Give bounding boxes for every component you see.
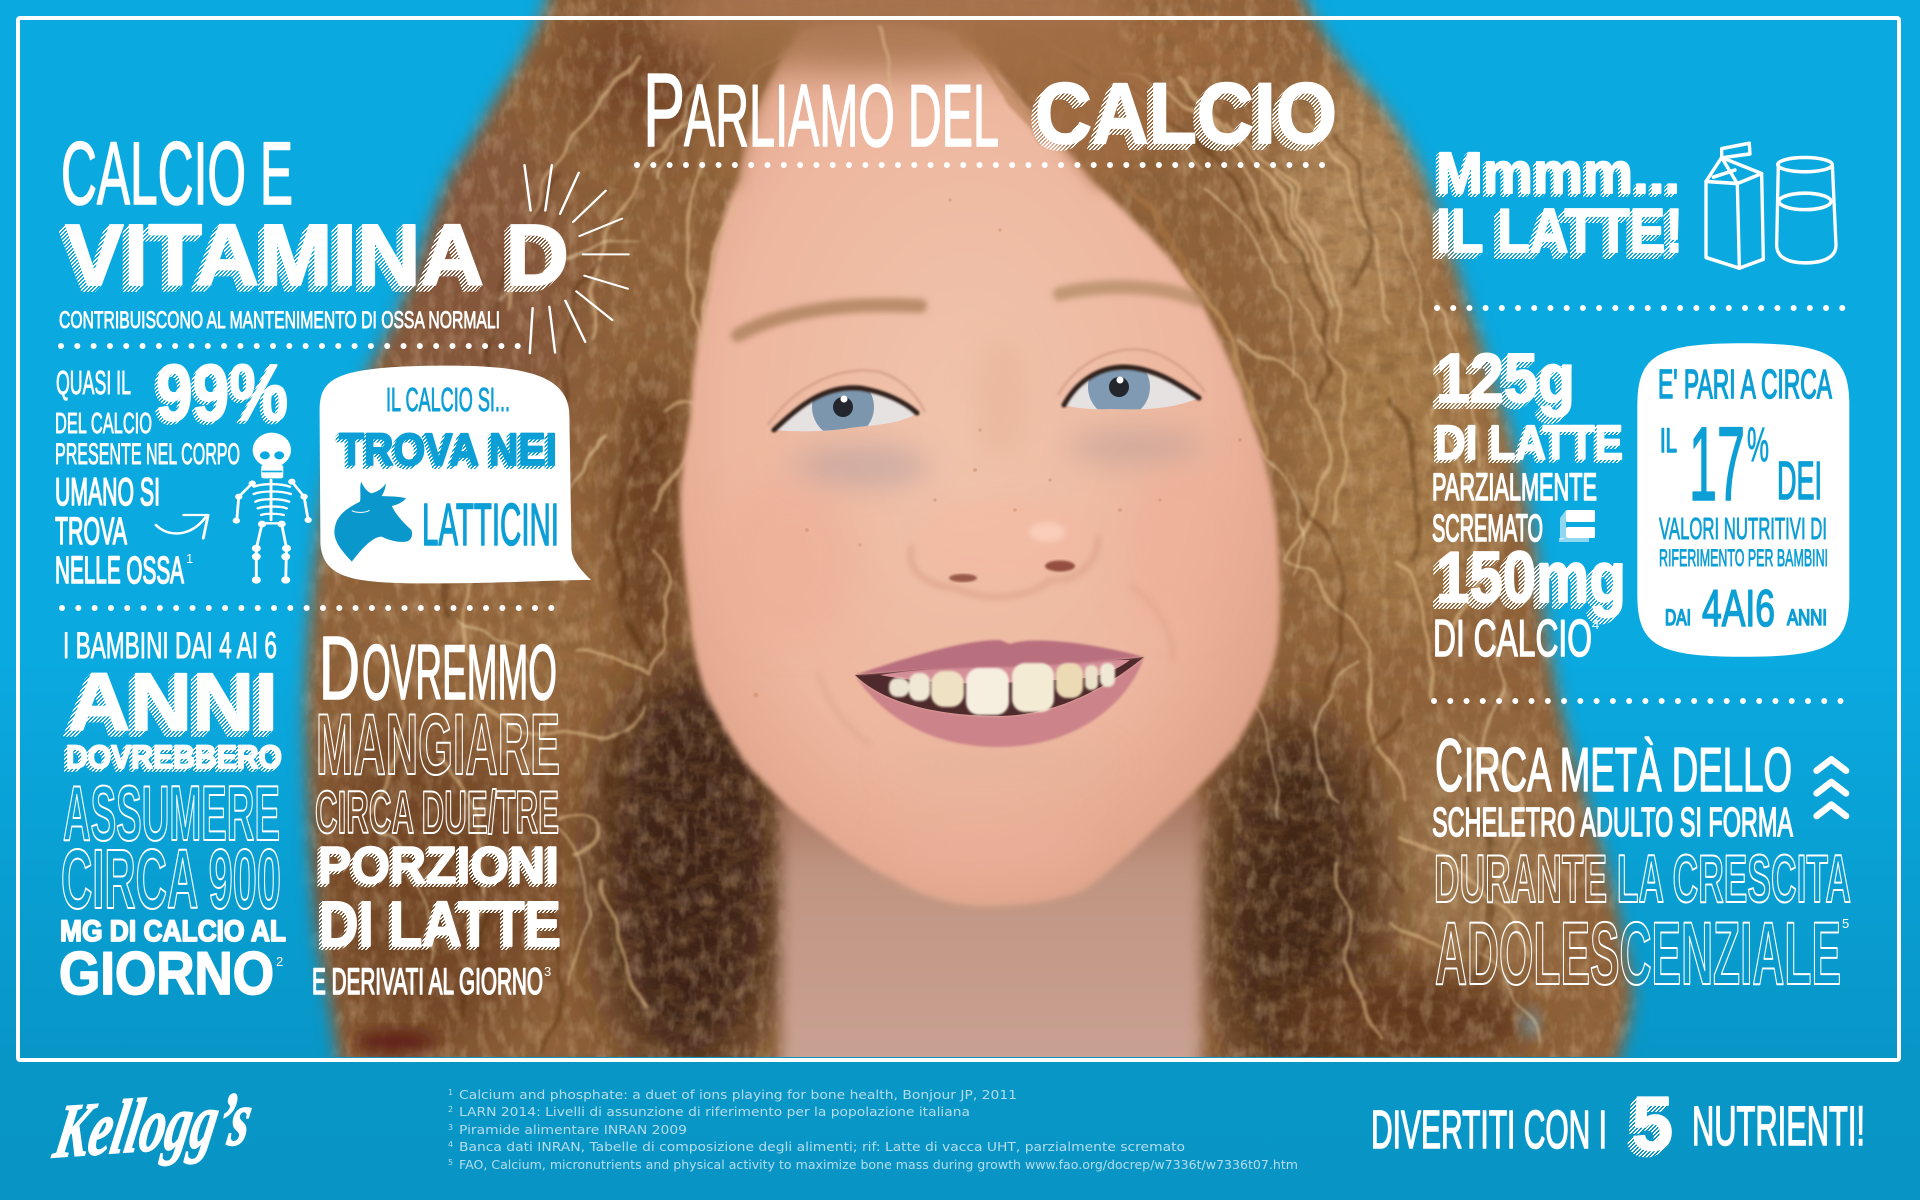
text: del calcio: DEL CALCIO xyxy=(55,408,152,440)
stat: 99%: 99% xyxy=(156,348,288,437)
icon: milk carton xyxy=(1706,143,1763,268)
text: trova: TROVA xyxy=(55,511,127,553)
callout: speech bubble xyxy=(320,366,591,583)
text: circa due/tre: CIRCA DUE/TRE xyxy=(315,779,559,846)
text: dovrebbero: DOVREBBERO xyxy=(66,739,282,775)
box text: anni: ANNI xyxy=(1787,605,1827,630)
text: mg di calcio al: MG DI CALCIO AL xyxy=(60,915,286,948)
rosy cheeks and chin xyxy=(720,465,1250,871)
icon: equals sign xyxy=(1559,510,1595,542)
text: nelle ossa: NELLE OSSA xyxy=(55,550,184,592)
box text: il: IL xyxy=(1660,422,1677,460)
panel: 17 percent white box xyxy=(1637,343,1849,657)
eyebrows xyxy=(738,287,1198,335)
text: e derivati al giorno: E DERIVATI AL GIORNO xyxy=(312,961,543,1002)
footnote mark 4: 4 xyxy=(1592,617,1599,632)
divider xyxy=(62,605,553,611)
panel: adolescent growth xyxy=(1432,724,1851,1003)
neck xyxy=(780,790,1202,1075)
stat: 125g: 125g xyxy=(1436,339,1575,417)
heading: mmmm: Mmmm... xyxy=(1436,141,1680,206)
box text: dai: DAI xyxy=(1665,605,1691,630)
footnotes: 1 xyxy=(448,1088,453,1097)
title: parliamo del: P xyxy=(643,53,685,169)
text: parzialmente: PARZIALMENTE xyxy=(1432,467,1597,509)
footnotes: 3 xyxy=(448,1123,453,1132)
panel: 17 percent white box: 17 xyxy=(1689,406,1745,523)
divider xyxy=(1434,698,1848,704)
text: scremato: SCREMATO xyxy=(1432,508,1543,550)
icon: upward chevrons xyxy=(1817,759,1846,816)
right eye xyxy=(1058,349,1205,418)
face xyxy=(680,23,1280,906)
bubble shape xyxy=(320,366,591,583)
box shape xyxy=(1637,343,1849,657)
footnotes: Calcium and phosphate: a duet of ions playing for bone health, Bonjour JP, 2011 xyxy=(459,1087,1017,1102)
title divider xyxy=(637,162,1338,168)
nose xyxy=(911,500,1098,597)
panel: mmmm il latte xyxy=(1436,141,1836,268)
icon: cow xyxy=(334,482,412,562)
text: di latte: DI LATTE xyxy=(1435,417,1623,470)
slogan: divertiti con i: DIVERTITI CON I xyxy=(1371,1100,1607,1160)
text: presente nel corpo: PRESENTE NEL CORPO xyxy=(55,438,240,471)
footnotes: Banca dati INRAN, Tabelle di composizione degli alimenti; rif: Latte di vacca UHT, parzialmente scremato xyxy=(459,1139,1185,1154)
under-eye shading xyxy=(794,340,1204,486)
panel: 99 percent in bones xyxy=(55,348,312,592)
text: quasi il: QUASI IL xyxy=(56,364,131,401)
text: di latte: DI LATTE xyxy=(319,888,561,960)
heading: vitamina D: VITAMINA D xyxy=(65,207,569,304)
icon: skeleton xyxy=(233,433,312,584)
footnote mark 5: 5 xyxy=(1842,916,1849,931)
footnotes: Piramide alimentare INRAN 2009 xyxy=(459,1122,687,1137)
teeth xyxy=(889,663,1115,715)
text: i bambini dai 4 ai 6: I BAMBINI DAI 4 AI 6 xyxy=(63,625,277,666)
text: umano si: UMANO SI xyxy=(55,471,160,514)
text: di calcio: DI CALCIO xyxy=(1433,610,1592,668)
box stat: percent sign: % xyxy=(1747,419,1769,472)
heading: calcio e: CALCIO E xyxy=(61,123,293,223)
smile xyxy=(818,585,1173,747)
text: circa 900: CIRCA 900 xyxy=(61,832,281,926)
icon: sun rays xyxy=(524,165,629,353)
footnotes: FAO, Calcium, micronutrients and physical activity to maximize bone mass during growth www.fao.org/docrep/w7336t/w7336t07.htm xyxy=(459,1157,1298,1172)
text: porzioni: PORZIONI xyxy=(318,837,559,895)
panel: 17 percent white box: DEI xyxy=(1777,451,1822,511)
panel: 125g of milk xyxy=(1432,339,1626,668)
hair strands xyxy=(370,20,1540,1050)
bubble text: il calcio si: IL CALCIO SI... xyxy=(386,381,510,418)
caption: CONTRIBUISCONO AL MANTENIMENTO DI OSSA NORMALI xyxy=(59,307,500,334)
text: mangiare: MANGIARE xyxy=(316,697,560,793)
left eye xyxy=(768,371,925,438)
footnotes: 2 xyxy=(448,1105,453,1114)
box text: 4 ai 6: 4AI6 xyxy=(1702,580,1775,638)
text: anni: ANNI xyxy=(68,657,278,748)
slogan: big 5: 5 xyxy=(1632,1082,1673,1167)
bubble text: trova nei: TROVA NEI xyxy=(339,424,557,475)
text: dovremmo xyxy=(319,619,557,719)
text: circa metà dello xyxy=(1435,724,1792,807)
footnote mark 1: 1 xyxy=(186,551,193,566)
infographic canvas: OVREMMO xyxy=(362,628,557,716)
footer xyxy=(48,1075,1865,1174)
panel: calcio e vitamina D xyxy=(59,123,629,353)
title: calcio: CALCIO xyxy=(1035,66,1337,162)
icon: glass of milk xyxy=(1777,157,1836,263)
footnotes: 4 xyxy=(448,1140,453,1149)
hair falling over the forehead xyxy=(650,0,1265,450)
icon: arrow xyxy=(156,515,208,538)
panel: children 4 to 6 xyxy=(59,625,286,1007)
footnotes xyxy=(448,1087,1298,1172)
panel: dovremmo mangiare xyxy=(312,619,561,1002)
text: giorno: GIORNO xyxy=(59,940,274,1007)
panel: children 4 to 6: ASSUMERE xyxy=(63,769,280,857)
footnotes: LARN 2014: Livelli di assunzione di riferimento per la popolazione italiana xyxy=(459,1104,970,1119)
clothing hint xyxy=(353,1030,437,1054)
heading: il latte: IL LATTE! xyxy=(1436,197,1683,266)
photo: smiling child with curly hair xyxy=(280,0,1650,1090)
stat: 150mg: 150mg xyxy=(1436,538,1626,618)
freckles xyxy=(754,198,1242,697)
divider xyxy=(61,343,518,349)
callout: speech bubble: LATTICINI xyxy=(422,492,559,558)
footnote mark 2: 2 xyxy=(276,954,283,969)
footnote mark 3: 3 xyxy=(544,964,551,979)
footnotes: 5 xyxy=(448,1158,453,1167)
divider xyxy=(1437,305,1850,311)
hair xyxy=(280,0,1650,1090)
text: circa metà dello: C xyxy=(1435,724,1463,807)
title: ARLIAMO DEL xyxy=(684,66,999,165)
text: dovremmo: D xyxy=(319,619,360,719)
logo: Kellogg's wordmark: Kellogg’s xyxy=(48,1075,259,1174)
